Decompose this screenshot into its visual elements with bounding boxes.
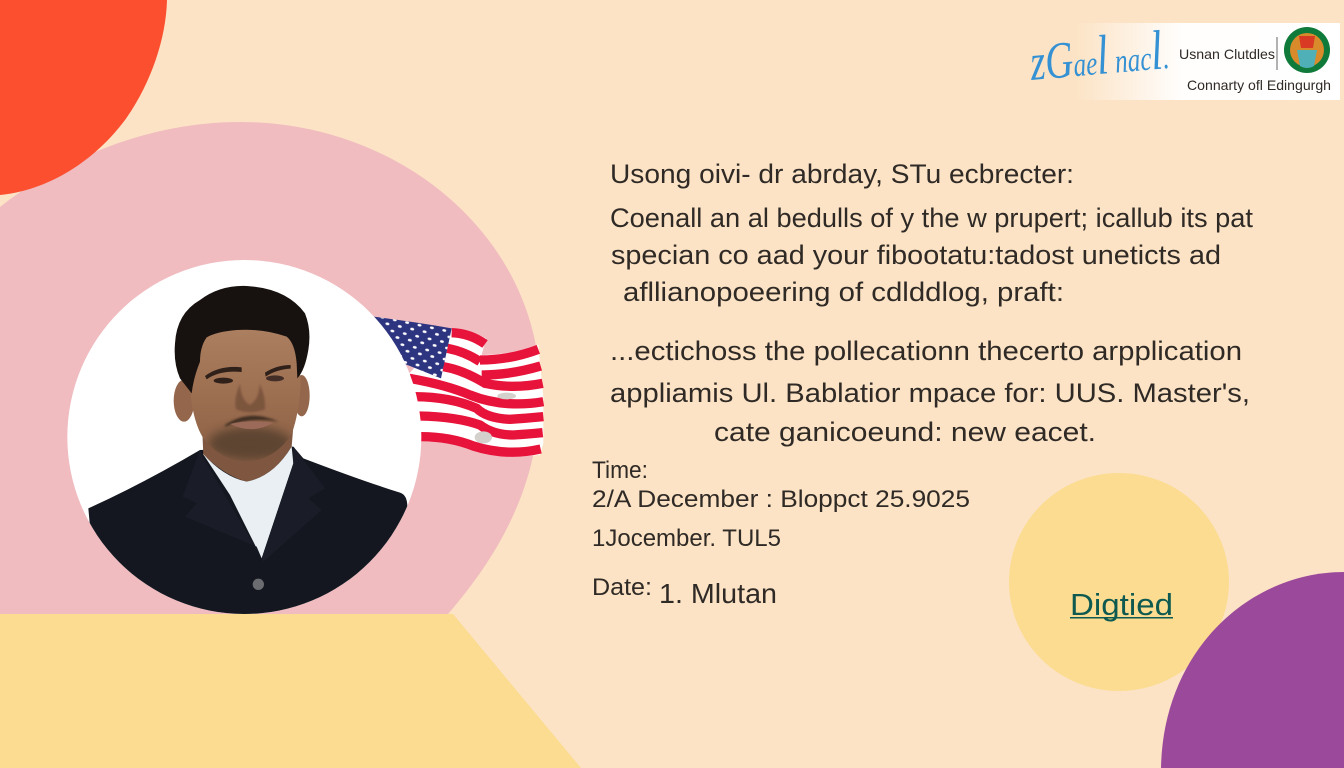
eyes	[214, 378, 233, 384]
neck	[202, 428, 294, 482]
decorative yellow circle	[1009, 473, 1229, 691]
paragraph one: afllianopoeering of cdlddlog, praft:	[623, 277, 1064, 307]
lips	[230, 421, 273, 429]
decorative red circle	[0, 0, 167, 195]
time value: 2/A December : Bloppct 25.9025	[592, 486, 970, 513]
signature: zGael nacl.	[1027, 19, 1171, 93]
paragraph two: cate ganicoeund: new eacet.	[714, 417, 1096, 447]
nose shading	[235, 383, 265, 412]
paragraph two	[610, 336, 1250, 447]
beard shading	[208, 427, 292, 460]
hair	[175, 286, 309, 393]
paragraph one	[610, 203, 1253, 307]
eyebrows	[205, 367, 242, 379]
paragraph two: ...ectichoss the pollecationn thecerto arpplication	[610, 336, 1242, 366]
text block: time and date	[592, 457, 970, 609]
moustache	[225, 416, 278, 427]
paragraph two: appliamis Ul. Bablatior mpace for: UUS. Master's,	[610, 378, 1250, 408]
face	[191, 327, 301, 461]
second time value: 1Jocember. TUL5	[592, 525, 781, 552]
paragraph one: specian co aad your fibootatu:tadost uneticts ad	[611, 240, 1221, 270]
date value: 1. Mlutan	[659, 578, 777, 609]
icon: crest	[1284, 27, 1330, 73]
ears	[174, 380, 194, 422]
organisation name: Usnan Clutdles	[1179, 46, 1275, 62]
icon: American flag	[373, 317, 543, 456]
paragraph one: Coenall an al bedulls of y the w prupert; icallub its pat	[610, 203, 1253, 233]
jacket	[88, 447, 407, 620]
decorative yellow shape	[0, 614, 581, 768]
logo background	[1075, 23, 1340, 100]
button	[253, 579, 264, 590]
link label: Digtied	[1070, 587, 1173, 622]
time label: Time:	[592, 457, 648, 484]
divider	[1276, 37, 1278, 70]
photo circle: portrait	[67, 260, 421, 620]
logo block	[1027, 19, 1340, 100]
text block: main description	[610, 159, 1253, 447]
jacket lapels	[200, 446, 296, 558]
organisation subtitle: Connarty ofl Edingurgh	[1187, 77, 1331, 93]
shirt	[203, 447, 293, 558]
date label: Date:	[592, 574, 652, 601]
decorative purple circle	[1161, 572, 1344, 768]
heading line: Usong oivi- dr abrday, STu ecbrecter:	[610, 159, 1074, 189]
decorative pink circle	[0, 122, 540, 614]
